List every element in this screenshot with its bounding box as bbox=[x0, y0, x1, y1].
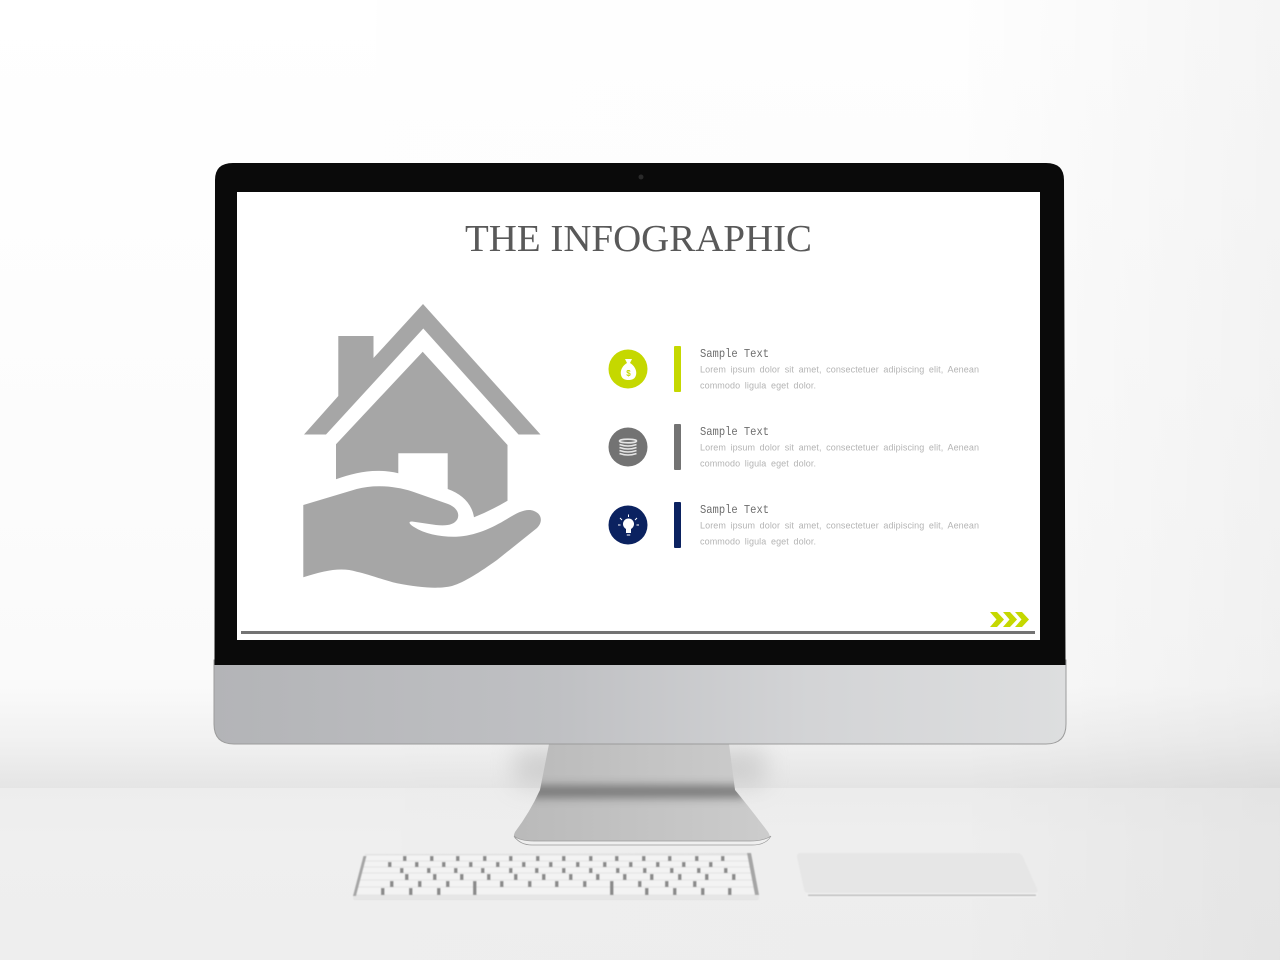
body text: Lorem ipsum dolor sit amet, consectetuer adipiscing elit, Aenean bbox=[700, 520, 979, 530]
arrow: triple chevrons bbox=[990, 612, 1029, 627]
list item 1: money bbox=[608, 346, 979, 392]
stand body bbox=[514, 744, 770, 841]
list item 2: coins bbox=[608, 424, 979, 470]
icon: coin stack circle bbox=[608, 428, 648, 466]
trackpad bbox=[797, 853, 1038, 898]
screen bbox=[237, 192, 1040, 640]
trackpad front edge bbox=[806, 893, 1038, 898]
heading: Sample Text bbox=[700, 425, 769, 439]
monitor bezel bbox=[214, 163, 1066, 665]
stand base rim bbox=[514, 836, 771, 845]
icon: light bulb circle bbox=[608, 506, 648, 544]
list item 3: idea bbox=[608, 502, 979, 548]
accent bar bbox=[674, 424, 681, 470]
body text: Lorem ipsum dolor sit amet, consectetuer adipiscing elit, Aenean bbox=[700, 442, 979, 452]
body text: commodo ligula eget dolor. bbox=[700, 380, 816, 390]
webcam bbox=[638, 174, 644, 180]
title: THE INFOGRAPHIC bbox=[465, 218, 812, 260]
body text bbox=[700, 442, 979, 468]
body text: commodo ligula eget dolor. bbox=[700, 536, 816, 546]
keyboard bbox=[350, 853, 762, 900]
desk surface bbox=[0, 788, 1280, 960]
stand cast shadow on wall bbox=[515, 748, 765, 786]
trackpad edge line bbox=[808, 894, 1036, 896]
monitor stand bbox=[505, 744, 780, 845]
house body bbox=[336, 352, 508, 517]
heading: Sample Text bbox=[700, 503, 769, 517]
body text: commodo ligula eget dolor. bbox=[700, 458, 816, 468]
accent bar bbox=[674, 502, 681, 548]
footer rule bbox=[241, 631, 1035, 634]
heading: Sample Text bbox=[700, 347, 769, 361]
key gaps bbox=[381, 856, 736, 895]
open hand bbox=[303, 486, 541, 588]
monitor bbox=[214, 163, 1066, 744]
body text bbox=[700, 364, 979, 390]
keyboard key rows bbox=[350, 856, 762, 894]
accent bar bbox=[674, 346, 681, 392]
keyboard right edge bbox=[747, 853, 759, 895]
trackpad top bbox=[797, 853, 1037, 893]
body text: Lorem ipsum dolor sit amet, consectetuer adipiscing elit, Aenean bbox=[700, 364, 979, 374]
keyboard front edge bbox=[353, 895, 759, 899]
house roof with chimney bbox=[304, 304, 540, 434]
icon: house in hand bbox=[303, 304, 541, 588]
monitor chin bbox=[214, 660, 1066, 744]
icon: money bag circle: $ bbox=[626, 369, 631, 378]
keyboard left edge bbox=[353, 856, 366, 896]
keyboard body bbox=[353, 853, 759, 900]
body text bbox=[700, 520, 979, 546]
icon: money bag circle bbox=[608, 350, 648, 388]
